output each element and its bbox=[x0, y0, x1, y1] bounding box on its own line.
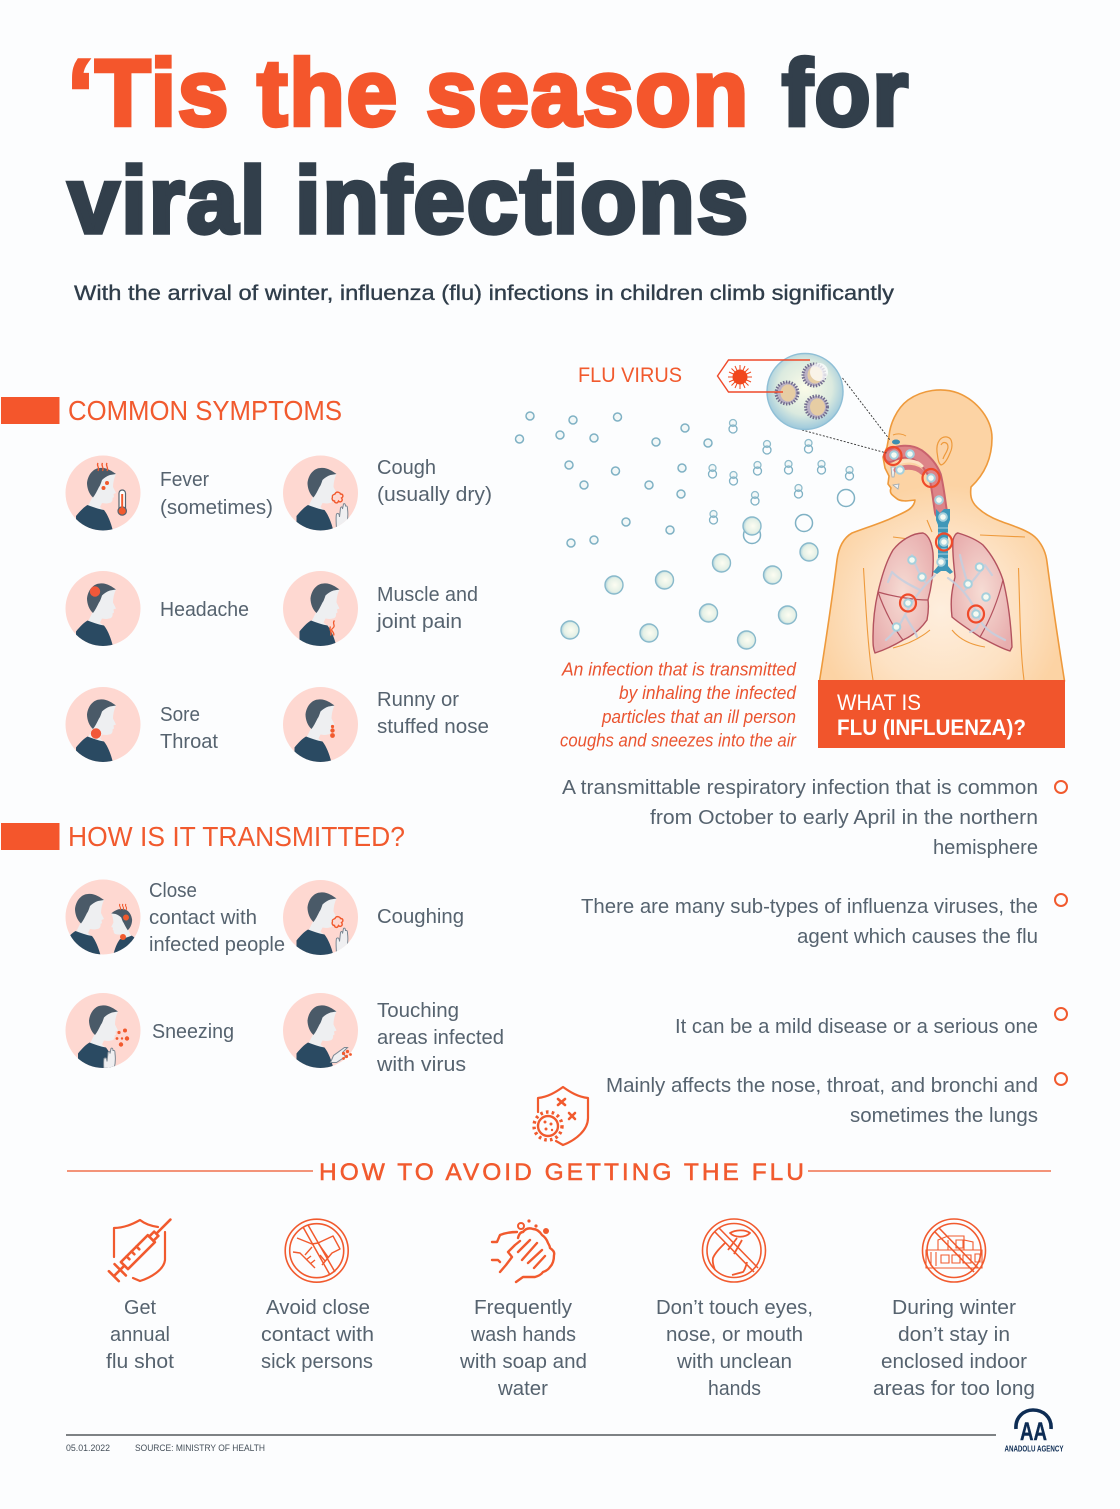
text: no contact: contact with bbox=[261, 1323, 374, 1346]
title: viral infections bbox=[68, 148, 750, 252]
text: flu shot: annual bbox=[110, 1323, 170, 1346]
footer: SOURCE: MINISTRY OF HEALTH bbox=[135, 1443, 265, 1453]
ear bbox=[937, 437, 952, 465]
text: washing hands bbox=[459, 1296, 587, 1400]
text: don't touch face: hands bbox=[708, 1377, 761, 1400]
icon: no contact bbox=[285, 1219, 348, 1282]
icon: cough bbox=[283, 456, 358, 535]
text: don't touch face: nose, or mouth bbox=[666, 1323, 803, 1346]
arm creases bbox=[864, 520, 1025, 680]
text: washing hands: water bbox=[497, 1377, 548, 1400]
text: flu shot: flu shot bbox=[106, 1350, 174, 1373]
magnified sphere bbox=[767, 354, 843, 430]
fact 1: hemisphere bbox=[933, 836, 1038, 859]
droplets spreading bbox=[516, 412, 854, 649]
footer bbox=[66, 1435, 996, 1453]
text: don't touch face bbox=[656, 1296, 813, 1400]
panel: common symptoms bbox=[1, 395, 492, 766]
fact 2 bbox=[581, 894, 1067, 948]
icon: virus shield bbox=[534, 1087, 588, 1145]
icon: flu shot bbox=[108, 1214, 176, 1282]
icon: runny nose bbox=[283, 687, 358, 766]
icon: close contact bbox=[64, 880, 140, 961]
logo: Anadolu Agency: ANADOLU AGENCY bbox=[1004, 1444, 1064, 1454]
bronchial branches bbox=[886, 555, 1005, 640]
caption: transmission: coughs and sneezes into the air bbox=[560, 730, 797, 750]
icon: virus bbox=[728, 365, 752, 389]
panel: prevention tips bbox=[106, 1214, 1035, 1400]
icon: sneezing bbox=[66, 993, 140, 1068]
title bbox=[68, 40, 910, 252]
dotted leader lines bbox=[802, 378, 890, 453]
right lung bbox=[951, 533, 1012, 651]
text: runny nose bbox=[377, 688, 489, 738]
text: sore throat: Throat bbox=[160, 730, 218, 753]
caption: transmission bbox=[560, 658, 797, 750]
text: muscle pain: Muscle and bbox=[377, 583, 478, 606]
text: close contact bbox=[149, 879, 285, 956]
diagram: human respiratory system bbox=[820, 390, 1064, 681]
text: no indoor areas: don’t stay in bbox=[898, 1323, 1010, 1346]
body outline bbox=[820, 390, 1064, 681]
fact 1 bbox=[562, 776, 1067, 859]
icon: don't touch face bbox=[702, 1219, 766, 1282]
icon: headache bbox=[66, 571, 140, 650]
text: no indoor areas: enclosed indoor bbox=[881, 1350, 1027, 1373]
text: no indoor areas bbox=[873, 1296, 1035, 1400]
title: for bbox=[782, 40, 910, 145]
icon: fever bbox=[66, 456, 140, 535]
fact 1: from October to early April in the northern bbox=[650, 806, 1038, 829]
heading: how is it transmitted: HOW IS IT TRANSMITTED? bbox=[68, 821, 405, 852]
fact 2: There are many sub-types of influenza viruses, the bbox=[581, 895, 1038, 918]
logo: Anadolu Agency: AA bbox=[1020, 1418, 1047, 1446]
left lung bbox=[873, 533, 933, 653]
icon: coughing bbox=[283, 880, 358, 960]
text: headache: Headache bbox=[160, 598, 249, 621]
text: coughing: Coughing bbox=[377, 905, 464, 928]
infection markers bbox=[884, 447, 984, 622]
text: flu shot bbox=[106, 1296, 174, 1373]
fact 4: Mainly affects the nose, throat, and bronchi and bbox=[606, 1074, 1038, 1097]
heading: how to avoid: HOW TO AVOID GETTING THE FLU bbox=[319, 1159, 804, 1186]
text: flu shot: Get bbox=[124, 1296, 156, 1319]
text: cough: (usually dry) bbox=[377, 483, 492, 506]
airway bbox=[890, 452, 941, 512]
text: no indoor areas: During winter bbox=[892, 1296, 1016, 1319]
text: no contact: sick persons bbox=[261, 1350, 373, 1373]
icon: muscle pain bbox=[283, 571, 358, 650]
eye and mouth details bbox=[893, 434, 906, 436]
virus tag bbox=[718, 360, 810, 392]
subtitle: With the arrival of winter, influenza (flu) infections in children climb significantly bbox=[74, 282, 895, 305]
text: fever bbox=[160, 468, 273, 519]
text: fever: (sometimes) bbox=[160, 496, 273, 519]
icon: sore throat bbox=[66, 687, 140, 766]
fact 4 bbox=[606, 1073, 1067, 1127]
text: cough bbox=[377, 456, 492, 506]
panel: flu facts bbox=[562, 776, 1067, 1127]
fact 4: sometimes the lungs bbox=[850, 1104, 1038, 1127]
text: touching: areas infected bbox=[377, 1026, 504, 1049]
icon: washing hands bbox=[492, 1219, 554, 1282]
fact 1: A transmittable respiratory infection that is common bbox=[562, 776, 1038, 799]
text: muscle pain: joint pain bbox=[376, 610, 462, 633]
panel: what is flu bbox=[818, 680, 1065, 748]
text: runny nose: Runny or bbox=[377, 688, 459, 711]
virus particles in airway and lungs bbox=[890, 450, 990, 631]
text: no contact bbox=[261, 1296, 374, 1373]
fact 2: agent which causes the flu bbox=[797, 925, 1038, 948]
text: washing hands: Frequently bbox=[474, 1296, 573, 1319]
panel: what is flu: FLU (INFLUENZA)? bbox=[837, 715, 1026, 740]
text: touching bbox=[376, 999, 504, 1076]
icon: touching bbox=[283, 993, 358, 1072]
panel: how is it transmitted bbox=[1, 821, 504, 1076]
text: fever: Fever bbox=[160, 468, 209, 491]
logo: Anadolu Agency bbox=[1004, 1410, 1064, 1454]
footer: 05.01.2022 bbox=[66, 1443, 110, 1453]
text: don't touch face: with unclean bbox=[676, 1350, 792, 1373]
text: close contact: Close bbox=[149, 879, 197, 902]
text: sore throat bbox=[160, 703, 218, 753]
icon: no indoor areas bbox=[922, 1219, 986, 1282]
text: touching: Touching bbox=[377, 999, 459, 1022]
text: cough: Cough bbox=[377, 456, 436, 479]
text: close contact: infected people bbox=[149, 933, 285, 956]
caption: transmission: An infection that is transmitted bbox=[561, 658, 797, 680]
text: touching: with virus bbox=[376, 1053, 466, 1076]
text: don't touch face: Don’t touch eyes, bbox=[656, 1296, 813, 1319]
text: washing hands: wash hands bbox=[470, 1323, 576, 1346]
text: sneezing: Sneezing bbox=[152, 1020, 234, 1043]
fact 3: It can be a mild disease or a serious one bbox=[675, 1015, 1038, 1038]
flu virus magnifier bbox=[718, 354, 890, 453]
title: ‘Tis the season bbox=[68, 40, 750, 145]
text: no indoor areas: areas for too long bbox=[873, 1377, 1035, 1400]
text: runny nose: stuffed nose bbox=[377, 715, 489, 738]
text: muscle pain bbox=[376, 583, 478, 633]
flu virus label: FLU VIRUS bbox=[578, 363, 682, 387]
trachea bbox=[933, 509, 953, 574]
text: sore throat: Sore bbox=[160, 703, 200, 726]
caption: transmission: by inhaling the infected bbox=[619, 682, 797, 703]
panel: what is flu: WHAT IS bbox=[837, 690, 921, 715]
text: washing hands: with soap and bbox=[459, 1350, 587, 1373]
caption: transmission: particles that an ill person bbox=[601, 706, 796, 727]
heading: common symptoms: COMMON SYMPTOMS bbox=[68, 395, 342, 426]
text: close contact: contact with bbox=[149, 906, 257, 929]
text: no contact: Avoid close bbox=[266, 1296, 370, 1319]
